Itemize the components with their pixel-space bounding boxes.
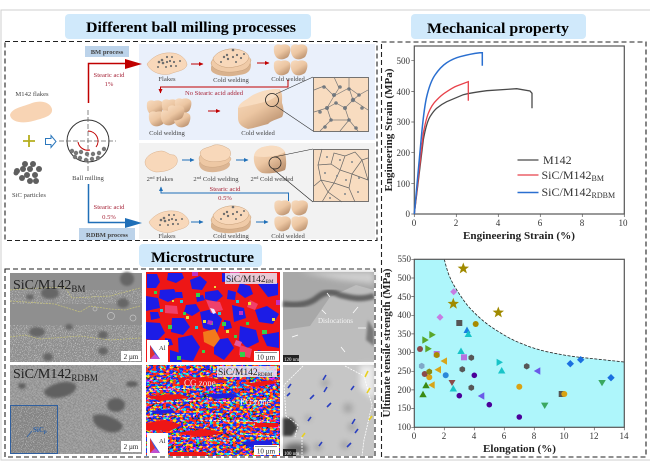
BM row 1: flakes bbox=[147, 53, 187, 83]
arrow bbox=[182, 159, 194, 161]
BM row 1: cold welding bbox=[211, 49, 251, 84]
x tick labels: 2 bbox=[442, 431, 446, 441]
y tick labels: 450 bbox=[398, 292, 412, 302]
label: BM process bbox=[85, 46, 129, 57]
scale bar: 2 µm bbox=[124, 353, 139, 361]
label: dislocations: Dislocations bbox=[318, 317, 353, 325]
y axis title: Engineering Strain (MPa) bbox=[384, 68, 395, 192]
RDBM row 1: 2nd cold welded: nd bbox=[254, 175, 259, 180]
BM row 1: flakes: Flakes bbox=[158, 76, 176, 83]
y tick labels: 200 bbox=[398, 385, 412, 395]
icon: ball mill: Ball milling bbox=[72, 175, 105, 182]
panel: mechanical property bbox=[382, 42, 646, 457]
micrograph label: SiC/M142 bbox=[13, 278, 71, 293]
RDBM row 1: 2nd cold welding: 2 bbox=[193, 176, 197, 183]
label: stearic acid 1%: Stearic acid bbox=[94, 72, 125, 79]
RDBM row 1: 2nd cold welding: Cold welding bbox=[201, 176, 239, 183]
RDBM row 1: 2nd cold welded: Cold welded bbox=[258, 176, 294, 183]
BM row 2: cold welding clump: Cold welding bbox=[149, 130, 186, 137]
arrow: no stearic acid added: No Stearic acid added bbox=[185, 90, 244, 97]
arrow bbox=[257, 62, 269, 64]
RDBM row 2: cold welded: Cold welded bbox=[271, 233, 305, 240]
chart: engineering stress-strain curves bbox=[384, 46, 628, 242]
inset: RDBM grain structure bbox=[273, 149, 368, 202]
RDBM row 1: 2nd flakes: Flakes bbox=[154, 176, 174, 183]
boundary curve bbox=[444, 259, 624, 362]
x tick labels: 8 bbox=[580, 218, 585, 228]
y tick labels: 100 bbox=[398, 422, 412, 432]
x tick labels bbox=[412, 431, 629, 441]
label: RDBM process bbox=[79, 228, 135, 240]
RDBM row 2: flakes bbox=[149, 211, 189, 240]
BM row 2: cold welding clump bbox=[147, 98, 191, 137]
legend: SiC/M142 bbox=[542, 185, 592, 199]
panel: microstructure bbox=[5, 269, 375, 457]
arrow: RDBM route bbox=[88, 184, 142, 228]
BM pathway background bbox=[139, 44, 375, 140]
icon: plus bbox=[23, 135, 35, 147]
x tick labels: 4 bbox=[496, 218, 501, 228]
RDBM row 2: cold welding: Cold welding bbox=[213, 233, 250, 240]
y tick labels: 0 bbox=[406, 209, 410, 219]
x tick labels: 0 bbox=[412, 431, 417, 441]
heading: microstructure: Microstructure bbox=[151, 250, 254, 266]
arrow bbox=[208, 110, 220, 112]
micrograph label: RDBM bbox=[71, 373, 98, 383]
y tick labels: 300 bbox=[396, 117, 410, 127]
scale bar: 120 nm bbox=[284, 358, 299, 363]
x tick labels: 8 bbox=[532, 431, 537, 441]
inset: SiC particles: SiC bbox=[33, 426, 44, 434]
heading: microstructure bbox=[139, 244, 262, 267]
inset: BM grain structure bbox=[276, 77, 368, 132]
scale bar: 10 µm bbox=[257, 448, 276, 456]
micrograph: SEM SiC/M142 RDBM bbox=[10, 365, 142, 454]
label: BM process: BM process bbox=[91, 49, 124, 56]
x tick labels: 6 bbox=[538, 218, 543, 228]
arrow: stearic acid return: 0.5% bbox=[218, 195, 232, 202]
RDBM row 1: 2nd cold welding bbox=[193, 145, 239, 183]
BM row 1: cold welding: Cold welding bbox=[213, 77, 250, 84]
icon: SiC particles bbox=[12, 161, 46, 199]
x axis title: Engineering Strain (%) bbox=[463, 231, 576, 242]
legend: BM bbox=[592, 174, 604, 183]
shaded region bbox=[414, 259, 624, 427]
y tick labels: 300 bbox=[398, 347, 412, 357]
scale bar: 2 µm bbox=[124, 443, 139, 451]
curve: SiC/M142 RDBM bbox=[414, 53, 482, 214]
arrow bbox=[256, 221, 268, 223]
scale bar: 100 nm bbox=[284, 452, 299, 457]
TEM image: RDBM grains bbox=[283, 365, 374, 457]
arrow: stearic acid return bbox=[161, 186, 288, 202]
label: stearic acid 0.5%: Stearic acid bbox=[94, 204, 125, 211]
arrow: no stearic acid added bbox=[160, 80, 288, 97]
icon: ball mill bbox=[59, 110, 116, 182]
y tick labels: 400 bbox=[396, 87, 410, 97]
x tick labels bbox=[412, 218, 628, 228]
icon: M142 flakes bbox=[10, 91, 52, 122]
y tick labels: 200 bbox=[396, 148, 410, 158]
TEM image: dislocations bbox=[283, 272, 374, 363]
legend: RDBM bbox=[592, 191, 615, 200]
map label bbox=[225, 273, 277, 285]
BM row 2: cold welded block: Cold welded bbox=[241, 130, 275, 137]
x tick labels: 2 bbox=[454, 218, 458, 228]
y tick labels: 250 bbox=[398, 366, 412, 376]
panel: ball milling process diagram bbox=[5, 42, 377, 240]
BM row 1: cold welded: Cold welded bbox=[271, 76, 305, 83]
x tick labels: 4 bbox=[472, 431, 477, 441]
scale bar: 10 µm bbox=[257, 354, 276, 362]
RDBM row 1: 2nd flakes: 2 bbox=[147, 176, 150, 183]
RDBM pathway background bbox=[139, 143, 375, 239]
heading: different ball milling processes bbox=[65, 14, 311, 39]
label: stearic acid 1% bbox=[94, 72, 125, 88]
label: stearic acid 1%: 1% bbox=[105, 81, 114, 88]
y tick labels: 550 bbox=[398, 254, 412, 264]
heading: different ball milling processes: Different ball milling processes bbox=[86, 20, 296, 36]
micrograph label: BM bbox=[71, 284, 85, 294]
x tick labels: 10 bbox=[560, 431, 569, 441]
x tick labels: 6 bbox=[502, 431, 507, 441]
y tick labels: 150 bbox=[398, 403, 412, 413]
chart: strength vs elongation scatter bbox=[382, 254, 629, 455]
BM row 1: cold welded bbox=[271, 44, 307, 83]
icon: M142 flakes: M142 flakes bbox=[15, 91, 49, 98]
heading: mechanical property: Mechanical property bbox=[427, 21, 570, 37]
label: stearic acid 0.5% bbox=[94, 204, 125, 221]
x axis title: Elongation (%) bbox=[483, 444, 557, 455]
y tick labels bbox=[398, 254, 412, 432]
legend: M142 bbox=[543, 153, 572, 167]
curve: M142 bbox=[414, 89, 532, 214]
RDBM row 2: cold welded bbox=[271, 200, 308, 240]
icon: SiC particles: SiC particles bbox=[12, 192, 46, 199]
IPF legend: Al bbox=[159, 345, 166, 352]
map label bbox=[217, 366, 277, 378]
y tick labels: 500 bbox=[396, 56, 410, 66]
BM row 2: cold welded block bbox=[238, 89, 284, 137]
RDBM row 1: 2nd cold welded: 2 bbox=[251, 176, 254, 183]
arrow bbox=[191, 221, 203, 223]
x tick labels: 0 bbox=[412, 218, 417, 228]
RDBM row 2: flakes: Flakes bbox=[158, 233, 176, 240]
x tick labels: 10 bbox=[618, 218, 628, 228]
EBSD map: SiC/M142 RDBM bbox=[146, 365, 280, 456]
curve: SiC/M142 BM bbox=[414, 82, 468, 214]
map label: BM bbox=[266, 280, 274, 285]
legend bbox=[518, 153, 615, 200]
y tick labels: 400 bbox=[398, 310, 412, 320]
x tick labels: 12 bbox=[590, 431, 598, 441]
RDBM row 1: 2nd flakes: nd bbox=[150, 175, 155, 180]
map label: SiC/M142 bbox=[218, 368, 258, 378]
icon: hollow arrow bbox=[46, 136, 56, 148]
RDBM row 2: cold welding bbox=[211, 206, 251, 240]
micrograph: SEM SiC/M142 BM bbox=[10, 272, 142, 362]
y tick labels: 500 bbox=[398, 273, 412, 283]
data points bbox=[417, 262, 615, 420]
heading: mechanical property bbox=[411, 14, 586, 39]
arrow bbox=[191, 63, 203, 65]
y axis title: Ultimate tensile strength (MPa) bbox=[382, 268, 393, 418]
y tick labels: 100 bbox=[396, 179, 410, 189]
micrograph label: SiC/M142 bbox=[13, 367, 71, 382]
inset: SiC particles: p bbox=[44, 430, 47, 435]
arrow: BM route bbox=[88, 59, 142, 103]
IPF legend: Al bbox=[159, 438, 166, 445]
y tick labels: 350 bbox=[398, 329, 412, 339]
label: stearic acid 0.5%: 0.5% bbox=[102, 214, 116, 221]
RDBM row 1: 2nd flakes bbox=[145, 151, 177, 183]
map label: RDBM bbox=[258, 373, 273, 378]
map label: SiC/M142 bbox=[226, 275, 266, 285]
label: RDBM process: RDBM process bbox=[86, 232, 128, 239]
y tick labels bbox=[396, 56, 410, 219]
FG zone label: FG zone bbox=[240, 397, 271, 407]
inset: SiC particles bbox=[10, 406, 58, 454]
arrow bbox=[236, 159, 248, 161]
legend: SiC/M142 bbox=[542, 168, 592, 182]
EBSD map: SiC/M142 BM bbox=[146, 272, 280, 362]
RDBM row 1: 2nd cold welded bbox=[251, 146, 294, 183]
RDBM row 1: 2nd cold welding: nd bbox=[197, 175, 202, 180]
arrow: stearic acid return: Stearic acid bbox=[210, 186, 241, 193]
CG zone label: CG zone bbox=[184, 378, 216, 388]
x tick labels: 14 bbox=[620, 431, 629, 441]
